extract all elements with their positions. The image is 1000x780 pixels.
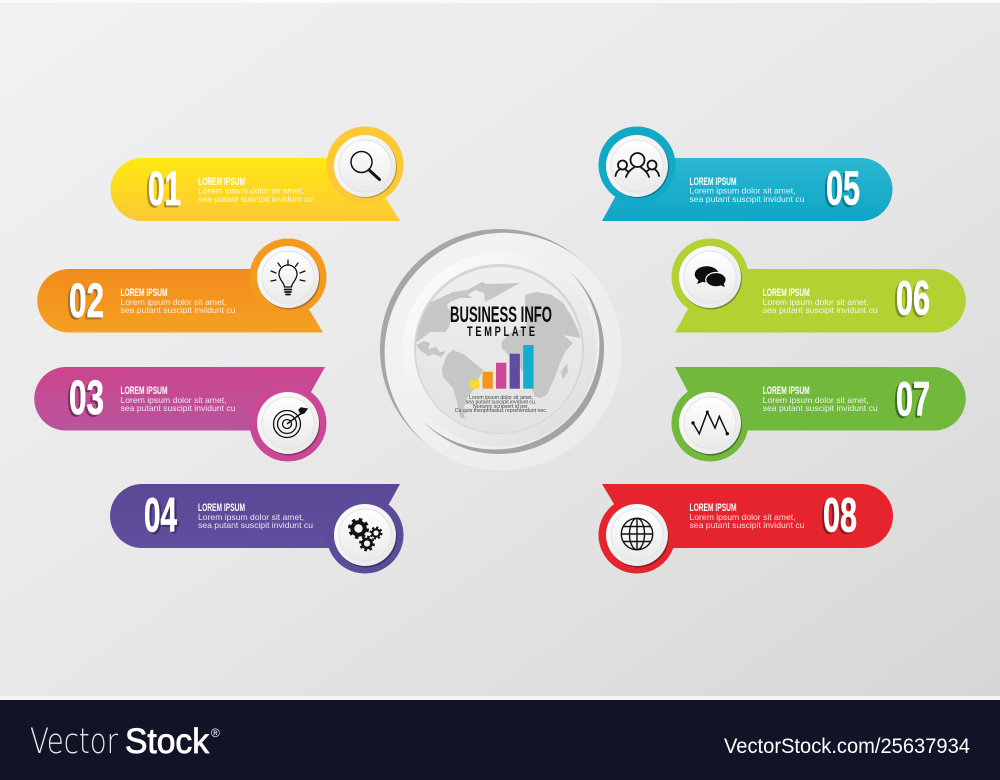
icon: target <box>274 408 307 438</box>
number 01: 01 <box>148 163 181 216</box>
center caption: Cu quis theophrastus reprehendunt nec. <box>455 408 547 414</box>
icon: gears <box>350 520 382 550</box>
number 07: 07 <box>894 376 928 428</box>
number 04: 04 <box>146 492 179 544</box>
number 06 <box>894 272 930 328</box>
footer bar <box>0 700 1000 780</box>
text 02: sea putant suscipit invidunt cu <box>120 305 236 315</box>
text 03: Lorem ipsum dolor sit amet, <box>120 395 226 405</box>
text 06: sea putant suscipit invidunt cu <box>763 305 878 315</box>
panel: 06 <box>672 238 966 332</box>
inner gray crescent <box>421 272 604 454</box>
central globe emblem <box>380 229 622 470</box>
top edge <box>0 0 1000 3</box>
text 05: Lorem ipsum dolor sit amet, <box>690 186 796 196</box>
number 01: 01 <box>146 165 179 218</box>
text 02: LOREM IPSUM <box>120 287 168 299</box>
number 06: 06 <box>894 274 928 328</box>
text 01: Lorem ipsum dolor sit amet, <box>198 186 304 196</box>
text 08: LOREM IPSUM <box>690 502 736 514</box>
number 08: 08 <box>821 492 855 544</box>
text 04: Lorem ipsum dolor sit amet, <box>198 512 304 522</box>
number 06: 06 <box>896 272 930 326</box>
text 06: Lorem ipsum dolor sit amet, <box>763 297 869 307</box>
text 08: sea putant suscipit invidunt cu <box>690 520 805 530</box>
bar chart <box>469 345 534 389</box>
icon: light bulb <box>271 260 305 294</box>
number 07: 07 <box>896 374 930 426</box>
footer logo: Stock <box>125 722 209 761</box>
icon: magnifier <box>351 152 380 180</box>
panel: 01 <box>111 126 404 221</box>
center caption: Lorem ipsum dolor sit amet, <box>469 395 533 401</box>
footer logo <box>30 722 220 762</box>
bottom edge <box>0 696 1000 700</box>
text 05: LOREM IPSUM <box>690 176 736 188</box>
number 03 <box>67 372 104 427</box>
text 07: sea putant suscipit invidunt cu <box>763 403 878 413</box>
text 05: sea putant suscipit invidunt cu <box>690 194 805 204</box>
text 05 <box>690 176 805 204</box>
text 07: Lorem ipsum dolor sit amet, <box>763 395 869 405</box>
text 04: sea putant suscipit invidunt cu <box>198 520 313 530</box>
text 01: LOREM IPSUM <box>198 176 245 188</box>
center caption: Nonumy scripsert id per. <box>473 404 529 410</box>
text 08 <box>690 502 805 530</box>
icon: zigzag line chart <box>691 410 729 435</box>
subtitle: TEMPLATE <box>467 325 535 340</box>
panel: 07 <box>672 367 966 462</box>
number 08 <box>821 490 857 544</box>
number 04 <box>144 490 179 544</box>
number 04: 04 <box>144 490 177 542</box>
text 07 <box>763 385 878 413</box>
number 07 <box>894 374 930 428</box>
outer light ring <box>382 232 622 470</box>
text 06 <box>763 287 878 315</box>
panel: 03 <box>34 367 326 462</box>
number 03: 03 <box>69 372 104 425</box>
text 03: LOREM IPSUM <box>120 385 168 397</box>
number 05: 05 <box>824 164 858 218</box>
text 03 <box>120 385 236 413</box>
text 07: LOREM IPSUM <box>763 385 810 397</box>
white ring <box>402 252 596 446</box>
footer logo: Stock <box>125 722 209 761</box>
outer gray crescent <box>380 229 580 445</box>
text 03: sea putant suscipit invidunt cu <box>120 403 236 413</box>
number 02: 02 <box>69 275 104 328</box>
icon: globe <box>621 518 653 550</box>
center caption: sea putant suscipit invidunt cu. <box>466 400 536 406</box>
text 04 <box>198 502 313 530</box>
number 08: 08 <box>823 490 857 542</box>
number 02 <box>67 275 104 330</box>
text 01 <box>198 176 313 204</box>
globe disc <box>414 264 584 434</box>
panel: 04 <box>110 484 404 574</box>
footer logo: ® <box>211 726 220 740</box>
icon: chat bubbles <box>695 266 726 287</box>
number 05: 05 <box>826 162 860 216</box>
world map <box>405 282 581 419</box>
number 02: 02 <box>67 277 102 330</box>
title: BUSINESS INFO <box>450 302 552 327</box>
icon: people <box>616 153 659 177</box>
text 06: LOREM IPSUM <box>763 287 810 299</box>
number 03: 03 <box>67 374 102 427</box>
number 05 <box>824 162 860 218</box>
footer logo: Vector <box>30 722 118 762</box>
center caption <box>455 395 547 414</box>
panel: 05 <box>598 126 892 221</box>
text 08: Lorem ipsum dolor sit amet, <box>690 512 796 522</box>
number 01 <box>146 163 181 218</box>
text 02 <box>120 287 236 315</box>
panel: 02 <box>37 238 326 332</box>
text 01: sea putant suscipit invidunt cu <box>198 194 313 204</box>
panel: 08 <box>598 484 893 574</box>
footer id: VectorStock.com/25637934 <box>724 735 970 758</box>
text 04: LOREM IPSUM <box>198 502 245 514</box>
text 02: Lorem ipsum dolor sit amet, <box>120 297 226 307</box>
